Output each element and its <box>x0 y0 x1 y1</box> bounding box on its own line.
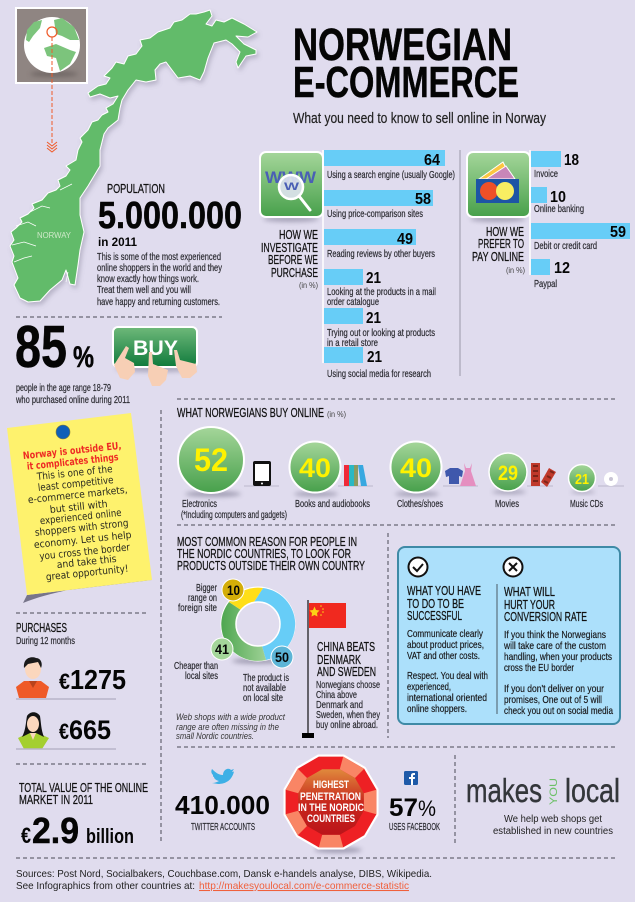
85 percent stat: who purchased online during 2011 <box>15 394 130 406</box>
icon: check <box>408 558 428 576</box>
twitter stat <box>175 769 270 833</box>
panel: advice box <box>398 547 620 724</box>
heading: most common reason: MOST COMMON REASON FOR PEOPLE IN <box>177 534 357 549</box>
population block: have happy and returning customers. <box>97 296 220 308</box>
column: what hurts: If you think the Norwegians <box>504 629 606 641</box>
china text: buy online abroad. <box>316 719 378 731</box>
segment: cheaper <box>221 602 266 661</box>
bubble: movies: 29 <box>498 462 518 485</box>
italic note: Web shops with a wide product <box>176 712 285 722</box>
twitter stat: 410.000 <box>175 790 270 820</box>
sticky note: e-commerce markets, <box>27 485 128 506</box>
icon: film strips <box>531 463 556 487</box>
logo: makes you local: local <box>565 772 620 809</box>
population block: Treat them well and you will <box>97 284 191 296</box>
china text: China above <box>316 689 357 701</box>
population block <box>97 181 242 308</box>
heading: how we prefer to pay: PAY ONLINE <box>472 249 524 264</box>
donut labels: range on <box>188 592 217 604</box>
icon: facebook <box>404 771 418 785</box>
bar chart: how we investigate: Using price-comparison sites <box>327 208 423 220</box>
sticky note: great opportunity! <box>45 564 129 583</box>
total market value: TOTAL VALUE OF THE ONLINE <box>19 780 148 795</box>
badge: highest penetration: IN THE NORDIC <box>298 802 364 814</box>
85 percent stat: % <box>73 341 94 374</box>
heading: what norwegians buy: (in %) <box>327 410 346 419</box>
donut labels: The product is <box>243 672 289 684</box>
tagline <box>493 814 613 837</box>
population block: POPULATION <box>107 181 165 196</box>
column: what hurts: WHAT WILL <box>504 584 555 599</box>
85 percent stat: people in the age range 18-79 <box>16 382 111 394</box>
column: what hurts: promises, One out of 5 will <box>504 694 602 706</box>
bubble: clothes: 40 <box>400 453 432 483</box>
www icon: W <box>284 181 300 193</box>
icon: books <box>344 465 367 486</box>
china flag <box>302 600 346 738</box>
column: what hurts: cross the EU border <box>504 662 574 674</box>
bar chart: how we investigate: Trying out or looking at products <box>327 327 435 339</box>
bar chart: how we prefer to pay: 59 <box>610 224 626 241</box>
column: what to do: VAT and other costs. <box>407 650 480 662</box>
map label: NORWAY <box>37 231 72 240</box>
facebook stat: % <box>418 796 436 821</box>
china text: DENMARK <box>317 652 361 667</box>
column: what to do: experienced, <box>407 681 451 693</box>
column: what to do: SUCCESSFUL <box>407 608 462 623</box>
bubble: books: Books and audiobooks <box>295 498 370 510</box>
bubble: 50: 50 <box>275 649 289 665</box>
heading: most common reason: THE NORDIC COUNTRIES, TO LOOK FOR <box>177 546 351 561</box>
logo: makes you local <box>466 772 620 809</box>
man purchases: 1275 <box>70 664 126 695</box>
85 percent stat: 85 <box>15 314 67 380</box>
total market value: billion <box>86 826 134 848</box>
italic note: range are often missing in the <box>176 722 279 732</box>
bar chart: how we prefer to pay: Online banking <box>534 203 584 215</box>
column: what to do: TO DO TO BE <box>407 596 464 611</box>
bar chart: how we investigate: 49 <box>397 231 413 248</box>
column: what to do: international oriented <box>407 692 487 704</box>
heading: most common reason: PRODUCTS OUTSIDE THEIR OWN COUNTRY <box>177 558 365 573</box>
heading: how we prefer to pay: (in %) <box>506 266 525 275</box>
bubble: 10: 10 <box>227 582 240 598</box>
badge: highest penetration: HIGHEST <box>313 779 349 791</box>
bar chart: how we investigate: 58 <box>415 191 431 208</box>
bar chart: how we investigate: 64 <box>424 152 440 169</box>
heading: how we investigate: INVESTIGATE <box>261 240 318 255</box>
footer: sources: Sources: Post Nord, Socialbakers, Couchbase.com, Dansk e-handels analyse, DIBS, Wikipedia. <box>16 868 432 880</box>
tagline: We help web shops get <box>504 814 602 825</box>
bar chart: how we investigate: Reading reviews by other buyers <box>327 248 435 260</box>
china text: Sweden, when they <box>316 709 381 721</box>
icon: CD <box>604 472 618 486</box>
china text <box>316 639 381 731</box>
column: what hurts: CONVERSION RATE <box>504 609 587 624</box>
column: what hurts: If you don't deliver on your <box>504 683 604 695</box>
map of Norway <box>10 10 257 302</box>
china text: AND SWEDEN <box>317 664 376 679</box>
heading: how we investigate: PURCHASE <box>271 265 318 280</box>
sticky note: Norway is outside EU, <box>22 441 122 462</box>
bar chart: how we investigate <box>324 150 455 380</box>
sticky note: experienced online <box>39 508 122 527</box>
bar chart: how we investigate: Looking at the products in a mail <box>327 286 436 298</box>
bar chart: how we prefer to pay <box>531 151 630 290</box>
bar chart: how we investigate: in a retail store <box>327 337 378 349</box>
buy button with hands: BUY <box>133 337 178 360</box>
icon: woman <box>18 712 49 749</box>
column: what to do: online shoppers. <box>407 703 467 715</box>
facebook stat: USES FACEBOOK <box>389 821 440 833</box>
bar chart: how we prefer to pay: 18 <box>564 152 579 169</box>
bubble: electronics: 52 <box>194 442 228 478</box>
woman purchases: € <box>59 719 69 744</box>
badge: highest penetration: PENETRATION <box>300 791 361 803</box>
donut labels: foreign site <box>178 602 217 614</box>
bar chart: how we investigate: Using social media for research <box>327 368 431 380</box>
heading: most common reason <box>177 534 365 573</box>
sticky note: least competitive <box>37 475 114 494</box>
italic note <box>176 712 285 741</box>
italic note: small Nordic countries. <box>176 731 254 741</box>
woman purchases: 665 <box>69 715 111 745</box>
bar chart: how we prefer to pay: Debit or credit card <box>534 240 597 252</box>
sticky note: This is one of the <box>35 464 113 483</box>
bubble: books <box>290 442 373 510</box>
heading: how we prefer to pay: HOW WE <box>486 224 524 239</box>
www icon <box>260 152 323 222</box>
china text: Norwegians choose <box>316 679 380 691</box>
donut labels: not available <box>243 682 286 694</box>
title: NORWEGIAN <box>293 19 512 70</box>
bubble: electronics: Electronics <box>182 498 217 510</box>
heading: how we investigate: (in %) <box>299 281 318 290</box>
bubble: movies <box>489 453 556 510</box>
logo: makes you local: YOU <box>548 778 560 805</box>
subtitle: What you need to know to sell online in Norway <box>293 110 546 127</box>
column: what hurts: HURT YOUR <box>504 597 555 612</box>
locator ring <box>47 27 57 37</box>
segment: range <box>229 588 263 610</box>
total market value <box>19 780 148 851</box>
bubble: music CDs <box>568 464 624 510</box>
bar chart: how we prefer to pay: 10 <box>550 189 566 206</box>
man purchases: € <box>59 669 70 694</box>
woman purchases <box>16 712 116 749</box>
china text: Denmark and <box>316 699 363 711</box>
heading: how we prefer to pay: PREFER TO <box>478 236 524 251</box>
85 percent stat <box>15 314 130 406</box>
population block: 5.000.000 <box>98 195 242 237</box>
logo: makes you local: makes <box>466 772 542 809</box>
population block: in 2011 <box>98 235 137 249</box>
column: what to do <box>407 583 488 715</box>
column: what hurts <box>503 584 613 717</box>
column: what to do: WHAT YOU HAVE <box>407 583 481 598</box>
purchases heading: During 12 months <box>16 635 75 647</box>
sticky note <box>7 413 152 603</box>
donut labels: Cheaper than <box>174 660 218 672</box>
total market value: MARKET IN 2011 <box>19 792 93 807</box>
population block: know exactly how things work. <box>97 273 199 285</box>
sticky note: and take this <box>56 554 117 571</box>
title <box>293 19 519 107</box>
bar chart: how we prefer to pay: Paypal <box>534 278 557 290</box>
segment: not available <box>254 588 295 660</box>
footer: sources: See Infographics from other countries at: <box>16 880 195 892</box>
heading: what norwegians buy: WHAT NORWEGIANS BUY ONLINE <box>177 405 324 420</box>
population block: This is some of the most experienced <box>97 251 221 263</box>
icon: man <box>16 657 49 698</box>
purchases heading: PURCHASES <box>16 620 67 635</box>
facebook stat <box>389 771 440 833</box>
donut labels <box>174 582 289 704</box>
bubble: music CDs: Music CDs <box>570 498 603 510</box>
china text: CHINA BEATS <box>317 639 375 654</box>
twitter stat: TWITTER ACCOUNTS <box>191 821 255 833</box>
title: E-COMMERCE <box>293 58 519 107</box>
bubble: clothes: Clothes/shoes <box>397 498 443 510</box>
column: what to do: Respect. You deal with <box>407 670 488 682</box>
donut labels: Bigger <box>196 582 217 594</box>
total market value: € <box>21 823 31 848</box>
man purchases <box>16 657 126 699</box>
footer: sources <box>16 868 432 892</box>
tagline: established in new countries <box>493 826 613 837</box>
bubble: movies: Movies <box>495 498 519 510</box>
bar chart: how we investigate: 21 <box>366 270 381 287</box>
total market value: 2.9 <box>32 810 79 851</box>
bubble: clothes <box>390 442 478 510</box>
bar chart: how we investigate: 21 <box>366 310 381 327</box>
globe locator box <box>16 8 87 83</box>
sticky note: economy. Let us help <box>33 530 132 551</box>
heading: how we investigate: BEFORE WE <box>268 252 318 267</box>
population block: online shoppers in the world and they <box>97 262 223 274</box>
heading: how we investigate: HOW WE <box>279 227 318 242</box>
bubble: 41: 41 <box>215 641 229 657</box>
bubble: electronics: (*Including computers and gadgets) <box>181 509 287 521</box>
column: what to do: about product prices, <box>407 639 484 651</box>
sticky note: it complicates things <box>26 452 119 473</box>
icon: cross <box>504 558 522 576</box>
badge: highest penetration <box>284 754 378 853</box>
bubble: books: 40 <box>299 453 331 483</box>
bar chart: how we investigate: 21 <box>367 349 382 366</box>
bar chart: how we prefer to pay: 12 <box>554 260 570 277</box>
donut chart <box>211 579 296 668</box>
buy button with hands <box>113 327 197 386</box>
facebook stat: 57 <box>389 794 418 822</box>
sticky note: you cross the border <box>39 542 131 563</box>
column: what to do: Communicate clearly <box>407 628 484 640</box>
donut labels: local sites <box>185 670 218 682</box>
icon: clothes <box>445 463 476 486</box>
pin <box>56 425 70 439</box>
icon: tablet <box>253 461 271 486</box>
footer: sources: http://makesyoulocal.com/e-commerce-statistic <box>199 880 409 892</box>
bubble: music CDs: 21 <box>575 471 589 488</box>
sticky note: shoppers with strong <box>34 518 129 539</box>
www icon: WWW <box>265 168 317 187</box>
arrow from globe to map <box>47 37 57 152</box>
heading: how we investigate <box>261 227 318 290</box>
payment card icon <box>467 152 530 222</box>
heading: how we prefer to pay <box>472 224 525 275</box>
bar chart: how we investigate: order catalogue <box>327 296 379 308</box>
bar chart: how we prefer to pay: Invoice <box>534 168 558 180</box>
column: what hurts: will take care of the custom <box>503 640 606 652</box>
icon: twitter bird <box>211 769 234 784</box>
sticky note: but still with <box>49 499 108 516</box>
purchases heading <box>16 620 75 647</box>
donut labels: on local site <box>243 692 283 704</box>
bar chart: how we investigate: Using a search engine (usually Google) <box>327 169 455 181</box>
bubble: electronics <box>178 427 287 521</box>
badge: highest penetration: COUNTRIES <box>307 813 355 825</box>
